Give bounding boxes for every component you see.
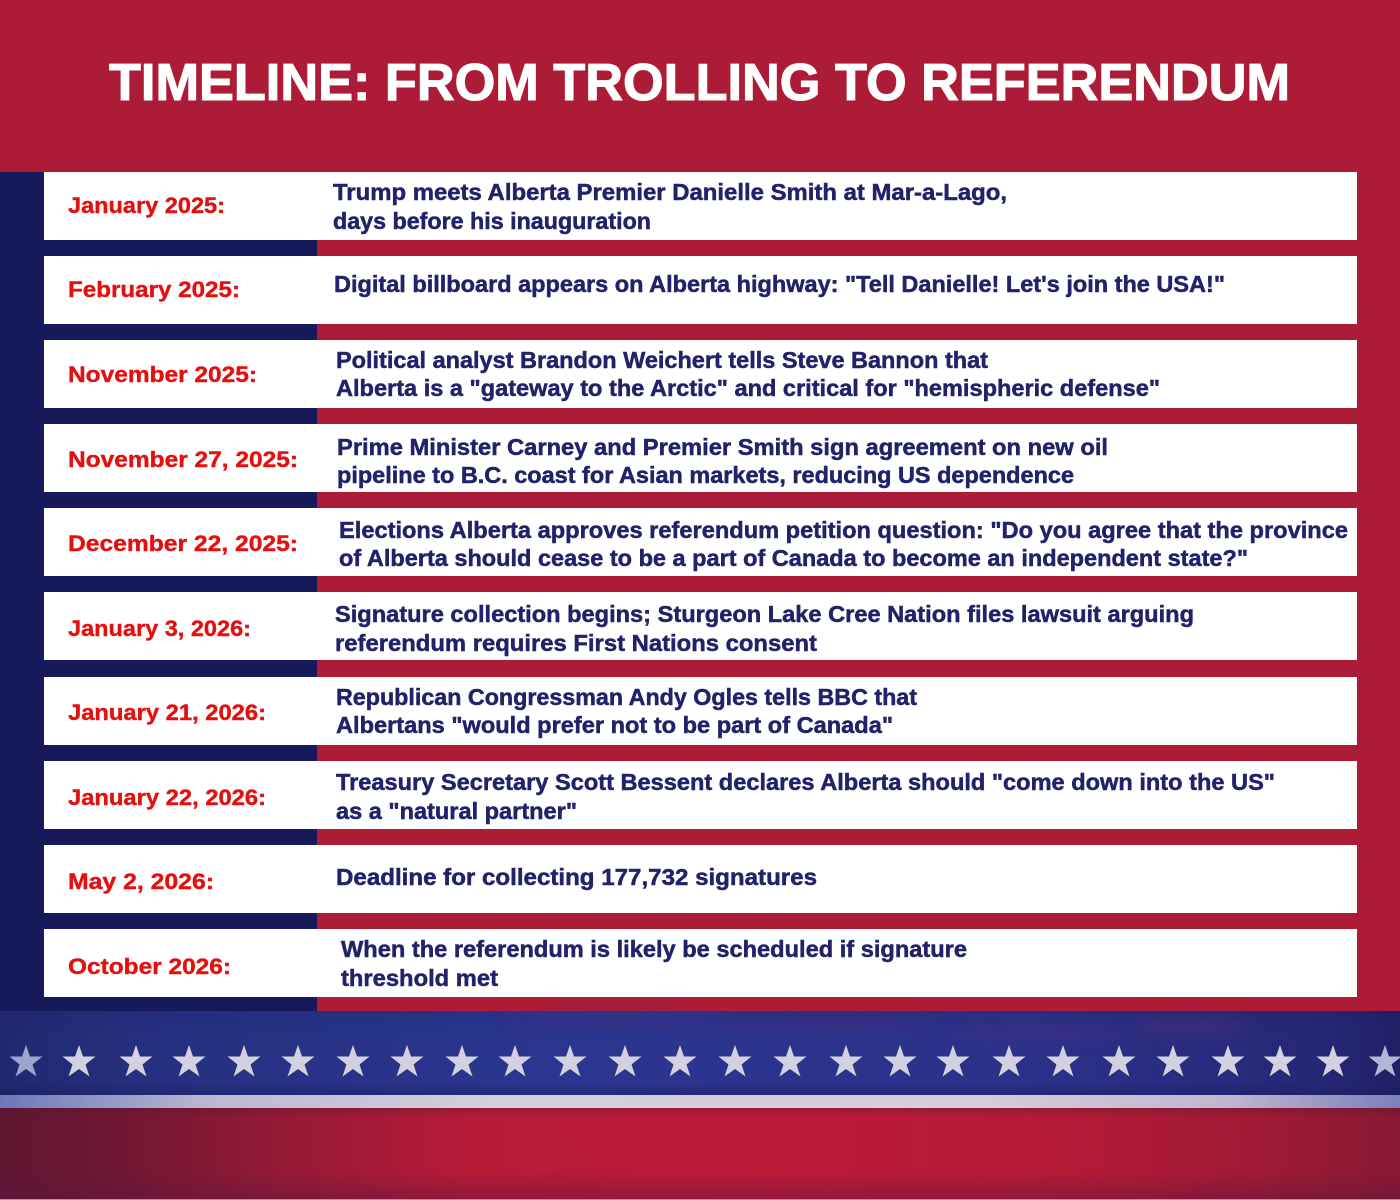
row: January 3, 2026 [44, 592, 1357, 660]
row: October 2026: threshold met [341, 965, 498, 991]
row: May 2, 2026: May 2, 2026: [68, 869, 214, 894]
row: November 2025 [44, 340, 1357, 408]
title: TIMELINE: FROM TROLLING TO REFERENDUM [109, 54, 1290, 112]
row: January 21, 2026 [44, 677, 1357, 745]
row: November 2025: November 2025: [68, 362, 257, 387]
row: February 2025 [44, 256, 1357, 324]
row: November 27, 2025 [44, 424, 1357, 492]
row: January 2025: days before his inauguration [333, 208, 651, 234]
row: January 2025 [44, 172, 1357, 240]
navy left column [0, 172, 317, 1012]
row: October 2026: When the referendum is likely be scheduled if signature [341, 936, 967, 962]
footer: red band [0, 1108, 1400, 1200]
row: January 2025: January 2025: [68, 193, 225, 218]
row: February 2025: Digital billboard appears on Alberta highway: "Tell Danielle! Let's join the USA!" [334, 271, 1225, 297]
row: January 3, 2026: January 3, 2026: [68, 616, 251, 641]
row: January 22, 2026: January 22, 2026: [68, 785, 266, 810]
row: December 22, 2025: of Alberta should cease to be a part of Canada to become an independent state?" [339, 545, 1248, 571]
row: January 2025: Trump meets Alberta Premier Danielle Smith at Mar-a-Lago, [333, 179, 1007, 205]
row: November 2025: Political analyst Brandon Weichert tells Steve Bannon that [336, 347, 988, 373]
footer: light stripe [0, 1095, 1400, 1108]
row: November 27, 2025: November 27, 2025: [68, 447, 298, 472]
stars row [10, 1045, 1400, 1076]
row: October 2026 [44, 929, 1357, 997]
row: January 22, 2026 [44, 761, 1357, 829]
footer: blue star band [0, 1011, 1400, 1095]
row: November 27, 2025: Prime Minister Carney and Premier Smith sign agreement on new oil [337, 434, 1108, 460]
row: January 21, 2026: Albertans "would prefer not to be part of Canada" [336, 712, 893, 738]
row: January 3, 2026: Signature collection begins; Sturgeon Lake Cree Nation files lawsuit arguing [335, 601, 1194, 627]
row: November 2025: Alberta is a "gateway to the Arctic" and critical for "hemispheric defense" [336, 375, 1160, 401]
row: January 3, 2026: referendum requires First Nations consent [335, 630, 817, 656]
row: December 22, 2025 [44, 508, 1357, 576]
row: December 22, 2025: December 22, 2025: [68, 531, 298, 556]
row: May 2, 2026: Deadline for collecting 177,732 signatures [336, 864, 817, 890]
row: October 2026: October 2026: [68, 954, 231, 979]
row: November 27, 2025: pipeline to B.C. coast for Asian markets, reducing US dependence [337, 462, 1074, 488]
row: January 22, 2026: Treasury Secretary Scott Bessent declares Alberta should "come down into the US" [336, 769, 1275, 795]
row: February 2025: February 2025: [68, 277, 240, 302]
row: January 21, 2026: Republican Congressman Andy Ogles tells BBC that [336, 684, 917, 710]
row: December 22, 2025: Elections Alberta approves referendum petition question: "Do you agree that the province [339, 517, 1348, 543]
row: January 22, 2026: as a "natural partner" [336, 798, 577, 824]
row: May 2, 2026 [44, 845, 1357, 913]
row: January 21, 2026: January 21, 2026: [68, 700, 266, 725]
